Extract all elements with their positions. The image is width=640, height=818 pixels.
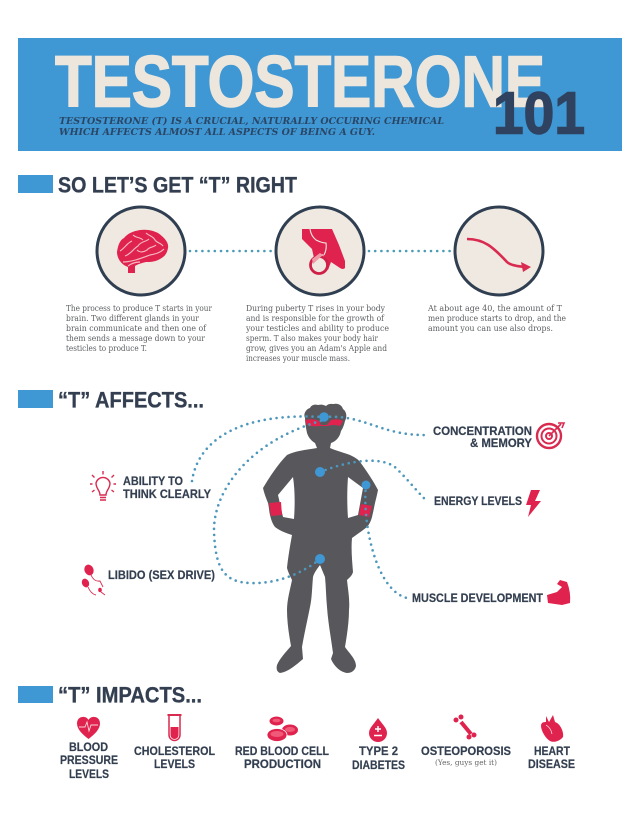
impact: cholesterol: LEVELS [154, 757, 195, 771]
impact: osteoporosis: OSTEOPOROSIS [421, 744, 511, 758]
label: concentration and memory [433, 424, 532, 450]
icon: blood drop [369, 718, 387, 742]
header banner [18, 38, 622, 151]
impact: red blood cells [235, 716, 329, 771]
impact: red blood cells: RED BLOOD CELL [235, 744, 329, 758]
headband [305, 419, 343, 426]
text: step three: At about age 40, the amount of T [427, 303, 563, 313]
text: step two [245, 303, 389, 363]
impact: heart disease: HEART [534, 744, 571, 758]
label: ability to think clearly: ABILITY TO [123, 474, 183, 488]
dotted connectors [192, 416, 428, 598]
impact: heart disease: DISEASE [528, 757, 575, 771]
heading: so let's get T right: SO LET’S GET “T” RIGHT [58, 172, 297, 198]
text: step two: increases your muscle mass. [246, 353, 350, 363]
text: step two: During puberty T rises in your body [246, 303, 385, 313]
impact: blood pressure [60, 717, 118, 781]
text: step one: The process to produce T starts in your [66, 303, 212, 313]
icon: sperm [80, 563, 105, 595]
icon: brain [97, 207, 185, 295]
icon: flexed arm [547, 580, 570, 605]
subtitle [59, 116, 444, 138]
text: step one: brain communicate and then one of [66, 323, 207, 333]
text: step three [427, 303, 566, 333]
icon: declining line [455, 207, 543, 295]
icon: light bulb [90, 471, 116, 500]
text: step one: brain. Two different glands in your [66, 313, 199, 323]
impact: type 2 diabetes [352, 718, 405, 772]
label: ability to think clearly [123, 474, 211, 501]
label: energy levels: ENERGY LEVELS [434, 494, 522, 508]
text: step one: them sends a message down to your [66, 333, 205, 343]
icon: test tube [168, 715, 182, 740]
wristbands [269, 502, 372, 517]
impact: heart disease [528, 715, 575, 771]
text: step one: testicles to produce T. [66, 343, 147, 353]
body hot spots [315, 412, 370, 564]
impact: osteoporosis [421, 714, 511, 767]
label: concentration and memory: CONCENTRATION [433, 424, 532, 438]
text: step three: men produce starts to drop, and the [428, 313, 566, 323]
icon: anatomical heart [541, 715, 563, 742]
icon: heart with pulse [77, 717, 100, 739]
subtitle: TESTOSTERONE (T) IS A CRUCIAL, NATURALLY OCCURING CHEMICAL [59, 116, 444, 127]
label: libido: LIBIDO (SEX DRIVE) [108, 568, 215, 582]
impact: red blood cells: PRODUCTION [244, 757, 321, 771]
process timeline [97, 207, 543, 295]
icon: target [537, 423, 564, 448]
heading: T affects: “T” AFFECTS... [58, 388, 204, 412]
heading: T impacts: “T” IMPACTS... [58, 682, 202, 708]
impact: type 2 diabetes: TYPE 2 [359, 744, 398, 758]
text: step two: and is responsible for the growth of [246, 313, 385, 323]
impact: cholesterol [134, 715, 215, 771]
title: TESTOSTERONE [55, 42, 545, 122]
note: (Yes, guys get it) [435, 758, 497, 767]
text: step one [66, 303, 212, 353]
label: muscle development: MUSCLE DEVELOPMENT [412, 591, 544, 605]
label: concentration and memory: & MEMORY [470, 436, 532, 450]
body silhouette [263, 404, 378, 673]
label: ability to think clearly: THINK CLEARLY [123, 487, 211, 501]
impact: blood pressure: BLOOD [69, 740, 108, 754]
icon: lightning bolt [526, 490, 541, 517]
impact: cholesterol: CHOLESTEROL [134, 744, 215, 758]
text: step two: your testicles and ability to produce [245, 323, 389, 333]
subtitle: WHICH AFFECTS ALMOST ALL ASPECTS OF BEING A GUY. [59, 127, 375, 138]
impact: type 2 diabetes: DIABETES [352, 758, 405, 772]
impact: blood pressure: PRESSURE [60, 753, 118, 767]
text: step two: sperm. T also makes your body hair [246, 333, 378, 343]
icon: bone [454, 714, 476, 740]
icon: blood cells [267, 716, 298, 742]
101 badge: 101 [493, 80, 585, 146]
text: step two: grow, gives you an Adam's Apple and [246, 343, 387, 353]
icon: testicle anatomy [276, 207, 364, 295]
text: step three: amount you can use also drops. [428, 323, 553, 333]
impact: blood pressure: LEVELS [69, 767, 109, 781]
